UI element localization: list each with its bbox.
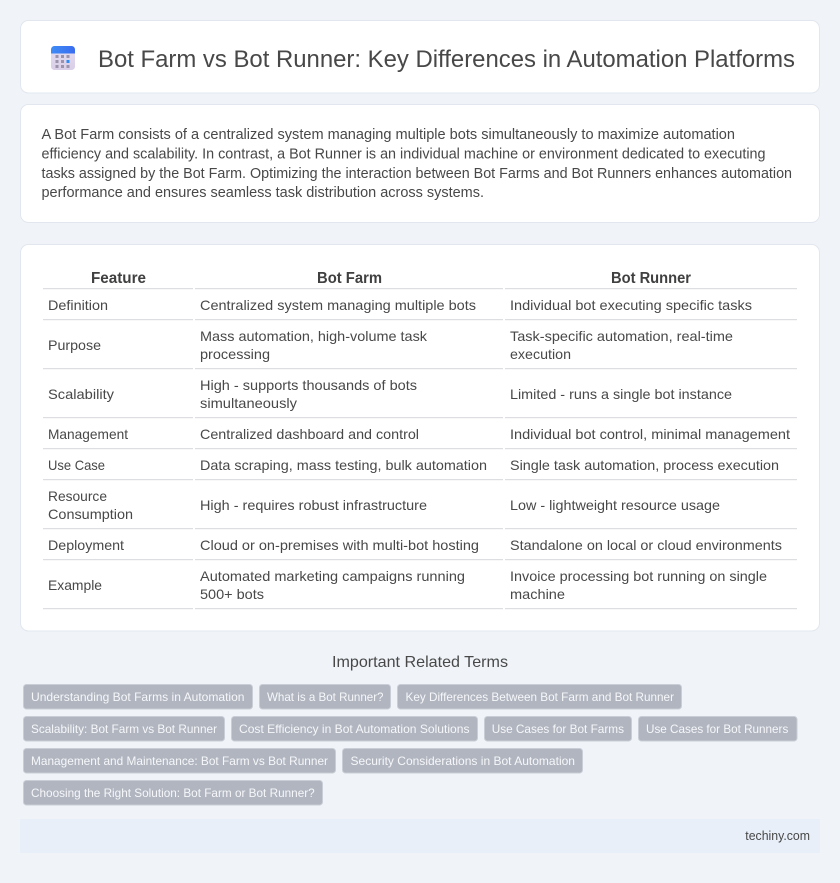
tag: Scalability: Bot Farm vs Bot Runner: [31, 722, 217, 736]
row: scalability: Limited - runs a single bot instance: [510, 386, 732, 402]
row: resource consumption: Resource: [48, 488, 107, 504]
table header row: Bot Farm: [317, 270, 382, 287]
footer source label: techiny.com: [745, 829, 810, 843]
row: use case: Data scraping, mass testing, bulk automation: [200, 457, 487, 473]
text block: intro paragraph: performance and ensures seamless task distribution across systems.: [42, 185, 484, 201]
row: scalability: [48, 377, 732, 411]
panel: comparison table: [20, 244, 820, 631]
tag: Understanding Bot Farms in Automation: [31, 690, 244, 704]
row: purpose: Purpose: [48, 337, 101, 353]
row: deployment: Standalone on local or cloud environments: [510, 537, 782, 553]
row: deployment: [48, 537, 782, 553]
tag: [398, 684, 682, 709]
row: resource consumption: High - requires robust infrastructure: [200, 497, 427, 513]
row: use case: [48, 457, 779, 473]
tag: Cost Efficiency in Bot Automation Solutions: [239, 722, 470, 736]
row: purpose: [48, 328, 733, 362]
tag: [638, 716, 797, 741]
tag: [24, 716, 224, 741]
tag: [342, 748, 582, 773]
icon: calendar grid: [51, 46, 75, 70]
row: management: [48, 426, 790, 442]
row: management: Centralized dashboard and control: [200, 426, 419, 442]
row: example: Example: [48, 577, 102, 593]
row: management: Management: [48, 426, 128, 442]
panel: title card: [20, 20, 820, 93]
row: scalability: Scalability: [48, 386, 114, 402]
panel: related term tags: [24, 684, 797, 805]
row: purpose: execution: [510, 346, 571, 362]
row: resource consumption: Low - lightweight resource usage: [510, 497, 720, 513]
tag: [260, 684, 390, 709]
row: definition: [48, 297, 752, 313]
row: purpose: Mass automation, high-volume task: [200, 328, 428, 344]
row: purpose: Task-specific automation, real-time: [510, 328, 733, 344]
row: example: Invoice processing bot running on single: [510, 568, 767, 584]
row: deployment: Deployment: [48, 537, 124, 553]
panel: intro text card: [20, 104, 820, 222]
tag: Management and Maintenance: Bot Farm vs Bot Runner: [31, 754, 328, 768]
row: scalability: High - supports thousands of bots: [200, 377, 417, 393]
tag: [24, 684, 252, 709]
tag: Key Differences Between Bot Farm and Bot Runner: [406, 690, 674, 704]
tag: Use Cases for Bot Farms: [492, 722, 624, 736]
tag: What is a Bot Runner?: [267, 690, 384, 704]
text block: intro paragraph: tasks assigned by the Bot Farm. Optimizing the interaction between Bot Farms and Bot Runners enhances automation: [42, 166, 792, 182]
text block: intro paragraph: [42, 127, 792, 201]
row: definition: Centralized system managing multiple bots: [200, 297, 476, 313]
table header row: Feature: [91, 270, 146, 287]
tag: [484, 716, 632, 741]
row: example: [48, 568, 767, 602]
row: example: Automated marketing campaigns running: [200, 568, 465, 584]
table rules: [43, 288, 797, 609]
row: resource consumption: Consumption: [48, 506, 133, 522]
text block: intro paragraph: A Bot Farm consists of a centralized system managing multiple bots simultaneously to maximize automation: [42, 127, 735, 143]
row: example: machine: [510, 586, 565, 602]
row: example: 500+ bots: [200, 586, 264, 602]
row: management: Individual bot control, minimal management: [510, 426, 790, 442]
row: use case: Use Case: [48, 457, 105, 473]
row: scalability: simultaneously: [200, 395, 297, 411]
tag: [24, 780, 322, 805]
tag: Choosing the Right Solution: Bot Farm or Bot Runner?: [31, 786, 315, 800]
tag: [24, 748, 336, 773]
row: use case: Single task automation, process execution: [510, 457, 779, 473]
heading: important related terms: Important Related Terms: [332, 654, 508, 671]
row: resource consumption: [48, 488, 720, 522]
table header row: [91, 270, 691, 287]
row: deployment: Cloud or on-premises with multi-bot hosting: [200, 537, 479, 553]
tag: [232, 716, 478, 741]
table header row: Bot Runner: [611, 270, 691, 287]
footer bar: [20, 819, 820, 853]
row: definition: Definition: [48, 297, 108, 313]
tag: Security Considerations in Bot Automation: [350, 754, 575, 768]
title: Bot Farm vs Bot Runner: Key Differences in Automation Platforms: [98, 46, 795, 73]
row: purpose: processing: [200, 346, 270, 362]
text block: intro paragraph: efficiency and scalability. In contrast, a Bot Runner is an individual machine or environment dedicated to executing: [42, 146, 766, 162]
tag: Use Cases for Bot Runners: [646, 722, 788, 736]
row: definition: Individual bot executing specific tasks: [510, 297, 752, 313]
